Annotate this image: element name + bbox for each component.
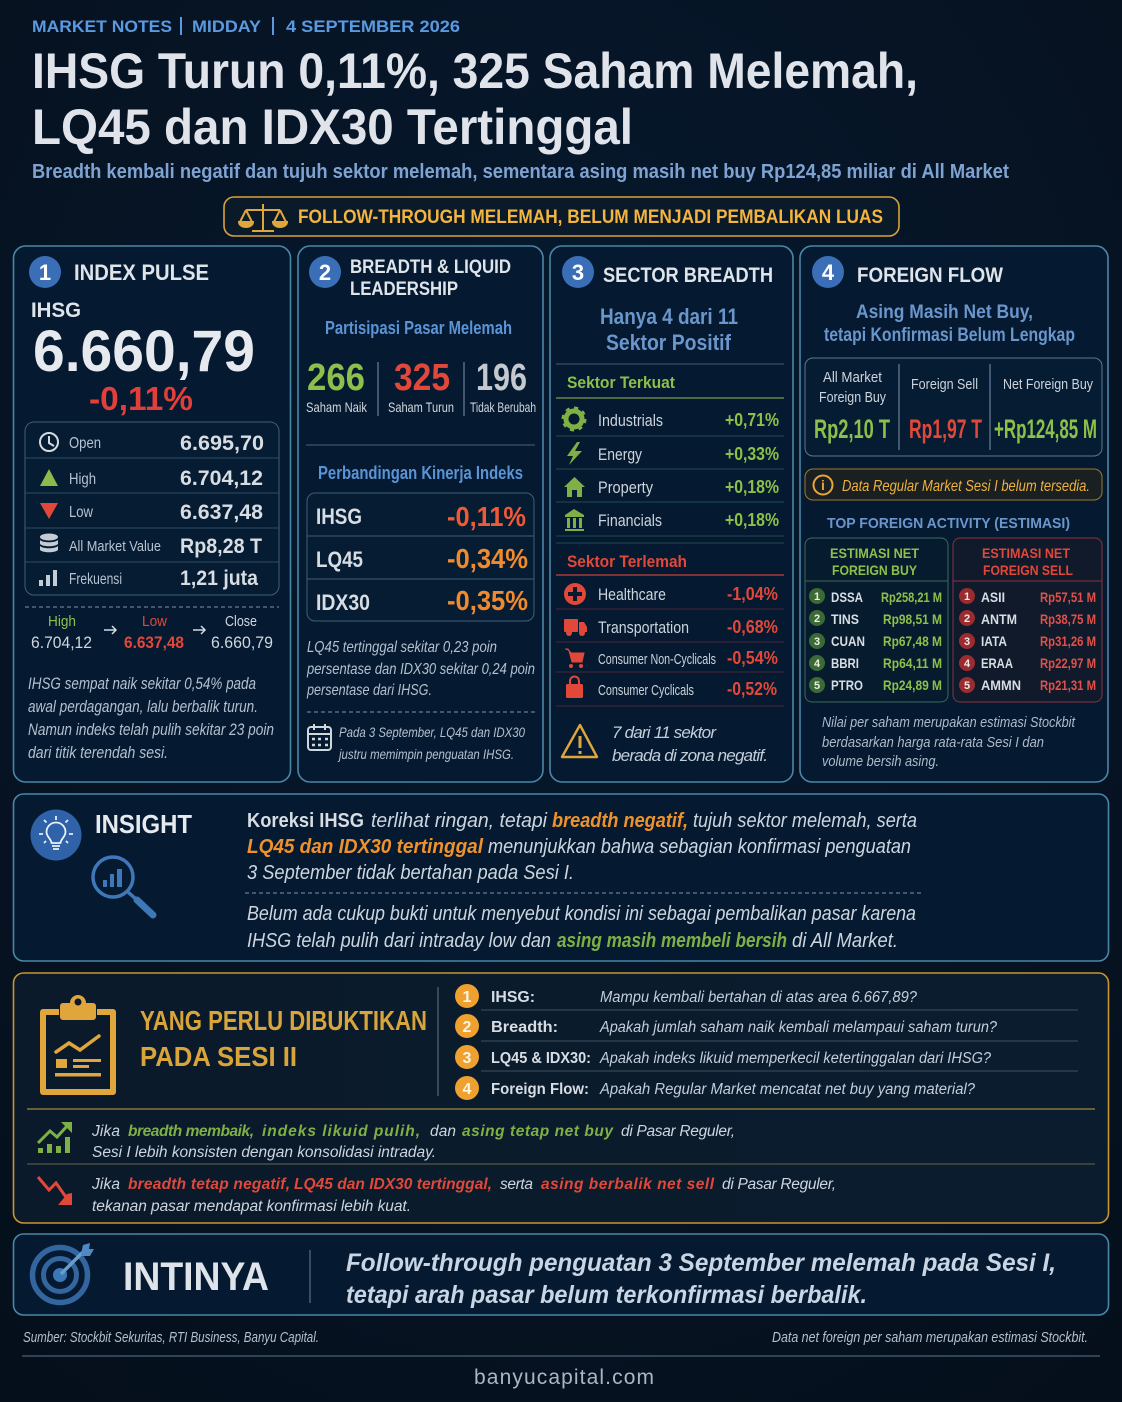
panel: bottom line [14, 1234, 1108, 1315]
scenario: negative: di Pasar Reguler, [722, 1176, 836, 1193]
table: net foreign buy: 4 [814, 658, 821, 670]
sector note: 7 dari 11 sektor [612, 723, 717, 742]
OHLC table: Low [69, 504, 93, 521]
scenario: positive: indeks likuid pulih, [262, 1123, 420, 1140]
weakest sectors: -0,52% [727, 679, 777, 699]
note: 3 September: justru memimpin penguatan IHSG. [337, 746, 514, 762]
foreign headline: Asing Masih Net Buy, [856, 302, 1033, 323]
icon: bars [39, 570, 57, 586]
scenario: positive: dan [430, 1123, 456, 1140]
foreign flow table: Foreign Sell [911, 376, 978, 393]
icon: cart [565, 649, 584, 668]
icon: house [564, 477, 585, 497]
table: net foreign buy: FOREIGN BUY [832, 562, 918, 578]
table: net foreign buy: Rp24,89 M [883, 677, 942, 693]
item 3: 3 [463, 1050, 472, 1067]
icon: calendar [308, 724, 331, 750]
IHSG headline value: 6.660,79 [33, 319, 255, 384]
header eyebrow [32, 17, 460, 36]
insight text: Koreksi IHSG [247, 810, 364, 832]
foreign estimate note [822, 714, 1076, 770]
bottom line text [346, 1249, 1056, 1309]
strongest sectors: Sektor Terkuat [567, 373, 675, 392]
breadth commentary: persentase dari IHSG. [306, 682, 432, 699]
weakest sectors: -0,54% [727, 648, 778, 668]
foreign flow table: Rp2,10 T [814, 414, 890, 444]
scenario: negative: serta [500, 1176, 533, 1193]
item 2: 2 [463, 1019, 472, 1036]
proof heading [140, 1005, 427, 1072]
index comparison: -0,34% [447, 543, 528, 574]
scenario: negative: asing berbalik net sell [541, 1176, 715, 1193]
table: net foreign buy: CUAN [831, 633, 865, 649]
table: net foreign buy: TINS [831, 611, 859, 627]
table: net foreign buy: Rp64,11 M [883, 655, 942, 671]
item 2 [455, 1014, 997, 1038]
table: net foreign sell [953, 538, 1102, 702]
item 2: Apakah jumlah saham naik kembali melampaui saham turun? [599, 1019, 997, 1036]
OHLC table [25, 422, 279, 595]
insight heading: INSIGHT [95, 809, 192, 839]
table: net foreign buy: Rp258,21 M [881, 589, 942, 605]
icon: up triangle [40, 469, 58, 486]
insight text: LQ45 dan IDX30 tertinggal [247, 836, 483, 858]
icon: database [40, 534, 58, 552]
table: net foreign buy [805, 538, 948, 702]
strongest sectors: +0,18% [725, 477, 779, 497]
scenario: negative [38, 1176, 836, 1215]
note: 3 September [337, 724, 525, 762]
breadth commentary: persentase dan IDX30 sekitar 0,24 poin [306, 661, 535, 678]
OHLC table: High [69, 471, 96, 488]
market participation: Partisipasi Pasar Melemah [325, 318, 512, 338]
table: net foreign buy: ESTIMASI NET [830, 545, 919, 561]
weakest sectors: -0,68% [727, 617, 778, 637]
table: net foreign sell: ASII [981, 589, 1005, 605]
scenario: negative: LQ45 dan IDX30 tertinggal, [294, 1176, 492, 1193]
index commentary [28, 674, 274, 762]
header eyebrow: MARKET NOTES [32, 17, 172, 36]
scenario: positive: di Pasar Reguler, [621, 1123, 735, 1140]
header eyebrow: 4 SEPTEMBER 2026 [286, 17, 460, 36]
panel 2 heading [309, 256, 511, 300]
weakest sectors: Healthcare [598, 585, 666, 604]
title: LQ45 dan IDX30 Tertinggal [32, 99, 633, 155]
bottom line heading: INTINYA [123, 1255, 269, 1299]
OHLC table: All Market Value [69, 538, 161, 555]
weakest sectors [556, 552, 784, 706]
insight text: asing masih membeli bersih [557, 930, 787, 952]
proof heading: YANG PERLU DIBUKTIKAN [140, 1005, 427, 1036]
market participation: 196 [476, 357, 527, 399]
panel 4 heading: 4 [822, 260, 835, 285]
strongest sectors: +0,71% [725, 410, 779, 430]
strongest sectors: Energy [598, 445, 642, 464]
footer website: banyucapital.com [474, 1366, 654, 1389]
OHLC table: Open [69, 435, 101, 452]
icon: warning triangle [562, 725, 597, 757]
table: net foreign buy: 1 [814, 591, 820, 603]
footer sources [23, 1329, 1088, 1346]
icon: magnifier with chart [93, 857, 153, 915]
foreign flow table: Rp1,97 T [909, 414, 982, 444]
top foreign activity heading: TOP FOREIGN ACTIVITY (ESTIMASI) [827, 515, 1070, 532]
item 4 [455, 1076, 975, 1100]
insight text: IHSG telah pulih dari intraday low dan [247, 930, 551, 952]
sector headline: Sektor Positif [606, 330, 732, 355]
scenario: positive: Sesi I lebih konsisten dengan konsolidasi intraday. [92, 1144, 436, 1161]
item 1: IHSG: [491, 989, 535, 1006]
index comparison: IHSG [316, 504, 362, 529]
table: net foreign sell: ESTIMASI NET [982, 545, 1070, 561]
OHLC table: 6.704,12 [180, 467, 263, 490]
checklist [455, 984, 1078, 1100]
item 4: Apakah Regular Market mencatat net buy yang material? [599, 1081, 975, 1098]
insight text: tujuh sektor melemah, serta [693, 810, 917, 832]
icon: down triangle [40, 503, 58, 519]
market participation: Saham Naik [306, 399, 368, 415]
table: net foreign sell: Rp57,51 M [1040, 589, 1096, 605]
market participation: Saham Turun [388, 399, 454, 415]
foreign headline: tetapi Konfirmasi Belum Lengkap [824, 325, 1075, 346]
scenario: positive: breadth membaik, [128, 1123, 254, 1140]
panel 4 heading: FOREIGN FLOW [857, 264, 1003, 287]
panel 1 heading: 1 [39, 260, 51, 285]
scenario: negative: breadth tetap negatif, [128, 1176, 290, 1193]
item 1 [455, 984, 917, 1008]
banner [224, 197, 899, 236]
panel 2 heading: BREADTH & LIQUID [350, 257, 511, 278]
insight text: breadth negatif, [552, 810, 688, 832]
table: net foreign sell: Rp31,26 M [1040, 633, 1096, 649]
insight text: terlihat ringan, tetapi [371, 810, 548, 832]
data alert: i [821, 477, 825, 493]
weakest sectors: -1,04% [727, 584, 778, 604]
index commentary: IHSG sempat naik sekitar 0,54% pada [28, 674, 256, 693]
foreign estimate note: volume bersih asing. [822, 753, 939, 770]
icon: lightning [567, 442, 582, 465]
market participation: Tidak Berubah [470, 399, 536, 415]
table: net foreign sell: AMMN [981, 677, 1021, 693]
bottom line text: tetapi arah pasar belum terkonfirmasi berbalik. [346, 1281, 867, 1309]
weakest sectors: Consumer Cyclicals [598, 682, 694, 699]
OHLC table: 1,21 juta [180, 567, 258, 590]
index comparison [307, 463, 534, 621]
item 4: 4 [463, 1081, 472, 1098]
foreign flow table: Net Foreign Buy [1003, 376, 1093, 393]
insight text [245, 810, 922, 952]
item 1: 1 [463, 989, 472, 1006]
title: IHSG Turun 0,11%, 325 Saham Melemah, [32, 43, 918, 99]
market participation: 325 [394, 357, 450, 399]
OHLC table: Frekuensi [69, 571, 122, 588]
foreign flow table: All Market [823, 369, 883, 386]
scenario: positive: Jika [91, 1123, 120, 1140]
index comparison: -0,11% [447, 501, 526, 532]
scenario: negative: tekanan pasar mendapat konfirmasi lebih kuat. [92, 1198, 411, 1215]
table: net foreign buy: 3 [814, 636, 820, 648]
title [32, 43, 918, 155]
sector note: berada di zona negatif. [612, 746, 768, 765]
panel: insight [14, 794, 1108, 961]
panel 3 heading [562, 256, 773, 288]
item 3 [455, 1045, 991, 1069]
foreign estimate note: berdasarkan harga rata-rata Sesi I dan [822, 734, 1044, 751]
table: net foreign sell: 3 [964, 636, 970, 648]
footer sources: Sumber: Stockbit Sekuritas, RTI Business, Banyu Capital. [23, 1329, 319, 1346]
subtitle: Breadth kembali negatif dan tujuh sektor melemah, sementara asing masih net buy Rp124,85 miliar di All Market [32, 161, 1009, 183]
high low close path: 6.660,79 [211, 633, 273, 652]
sector headline: Hanya 4 dari 11 [600, 304, 738, 329]
foreign flow table: Foreign Buy [819, 389, 886, 406]
weakest sectors: Sektor Terlemah [567, 552, 687, 571]
high low close path: High [48, 613, 76, 630]
strongest sectors: +0,18% [725, 510, 779, 530]
OHLC table: Rp8,28 T [180, 535, 262, 558]
table: net foreign buy: DSSA [831, 589, 863, 605]
bottom line text: Follow-through penguatan 3 September melemah pada Sesi I, [346, 1249, 1056, 1277]
table: net foreign buy: 5 [814, 680, 820, 692]
item 1: Mampu kembali bertahan di atas area 6.667,89? [600, 989, 917, 1006]
icon: bank [565, 509, 584, 531]
OHLC table: 6.637,48 [180, 501, 263, 524]
table: net foreign sell: IATA [981, 633, 1007, 649]
strongest sectors: +0,33% [725, 444, 779, 464]
icon: balance scale [239, 204, 287, 231]
note: 3 September: Pada 3 September, LQ45 dan IDX30 [339, 724, 525, 740]
table: net foreign sell: Rp22,97 M [1040, 655, 1096, 671]
breadth commentary: LQ45 tertinggal sekitar 0,23 poin [307, 639, 497, 656]
insight text: Belum ada cukup bukti untuk menyebut kondisi ini sebagai pembalikan pasar karena [247, 903, 916, 925]
strongest sectors [556, 373, 784, 543]
table: net foreign buy: BBRI [831, 655, 859, 671]
market participation: 266 [307, 357, 365, 399]
high low close path: 6.637,48 [124, 633, 184, 652]
index comparison: LQ45 [316, 547, 363, 572]
insight text: 3 September tidak bertahan pada Sesi I. [247, 862, 574, 884]
insight text: menunjukkan bahwa sebagian konfirmasi penguatan [488, 836, 911, 858]
panel 3 heading: 3 [572, 260, 584, 285]
panel: sector breadth [550, 246, 793, 782]
icon: clock [40, 433, 58, 451]
IHSG headline value: -0,11% [89, 380, 193, 417]
icon: rising chart [38, 1122, 72, 1153]
IHSG headline value: IHSG [31, 299, 81, 322]
foreign flow table [805, 358, 1102, 456]
panel: what must be proven [14, 973, 1108, 1223]
panel 1 heading: INDEX PULSE [74, 260, 209, 285]
header eyebrow: MIDDAY [192, 17, 262, 36]
panel 4 heading [812, 256, 1003, 288]
market participation [306, 318, 536, 416]
icon: health cross [564, 583, 586, 605]
panel 3 heading: SECTOR BREADTH [603, 264, 773, 287]
panel: breadth and liquid leadership [298, 246, 543, 782]
high low close path: Close [225, 613, 257, 630]
weakest sectors: Consumer Non-Cyclicals [598, 651, 716, 668]
table: net foreign sell: 1 [964, 591, 970, 603]
item 2: Breadth: [491, 1019, 558, 1036]
icon: light bulb [30, 810, 82, 860]
panel 2 heading: 2 [319, 260, 331, 285]
data alert [805, 469, 1102, 500]
table: net foreign sell: ANTM [981, 611, 1017, 627]
panel: index pulse [14, 246, 290, 782]
icon: clipboard chart [43, 995, 113, 1092]
table: net foreign sell: 2 [964, 613, 970, 625]
weakest sectors: Transportation [598, 618, 689, 637]
high low close path: 6.704,12 [31, 633, 92, 652]
insight text: di All Market. [792, 930, 898, 952]
index comparison: Perbandingan Kinerja Indeks [318, 463, 523, 483]
OHLC table: 6.695,70 [180, 432, 264, 455]
foreign headline [824, 302, 1075, 346]
icon: falling arrow [38, 1177, 72, 1205]
foreign estimate note: Nilai per saham merupakan estimasi Stockbit [822, 714, 1076, 731]
high low close path [31, 613, 273, 652]
scenario: positive [38, 1122, 735, 1161]
index commentary: dari titik terendah sesi. [28, 743, 168, 762]
table: net foreign sell: Rp38,75 M [1040, 611, 1096, 627]
table: net foreign sell: Rp21,31 M [1040, 677, 1096, 693]
item 4: Foreign Flow: [491, 1081, 589, 1098]
banner: FOLLOW-THROUGH MELEMAH, BELUM MENJADI PEMBALIKAN LUAS [298, 207, 883, 228]
sector headline [600, 304, 738, 355]
strongest sectors: Industrials [598, 411, 663, 430]
index comparison: -0,35% [447, 585, 528, 616]
strongest sectors: Property [598, 478, 653, 497]
icon: truck [564, 619, 587, 636]
proof heading: PADA SESI II [140, 1041, 297, 1072]
IHSG headline value [31, 299, 255, 417]
high low close path: Low [142, 613, 167, 630]
item 3: Apakah indeks likuid memperkecil ketertinggalan dari IHSG? [599, 1050, 991, 1067]
panel: foreign flow [800, 246, 1108, 782]
strongest sectors: Financials [598, 511, 662, 530]
table: net foreign sell: 5 [964, 680, 970, 692]
table: net foreign buy: 2 [814, 613, 820, 625]
table: net foreign sell: FOREIGN SELL [983, 562, 1073, 578]
sector note [612, 723, 768, 765]
panel 1 heading [29, 256, 209, 288]
index comparison: IDX30 [316, 590, 370, 615]
index commentary: Namun indeks telah pulih sekitar 23 poin [28, 720, 274, 739]
index commentary: awal perdagangan, lalu berbalik turun. [28, 697, 258, 716]
breadth commentary [306, 639, 535, 699]
table: net foreign buy: Rp67,48 M [883, 633, 942, 649]
icon: gear [563, 408, 585, 430]
icon: shopping bag [566, 676, 583, 698]
table: net foreign sell: 4 [964, 658, 971, 670]
table: net foreign buy: Rp98,51 M [883, 611, 942, 627]
table: net foreign sell: ERAA [981, 655, 1013, 671]
icon: target [32, 1243, 94, 1302]
scenario: negative: Jika [91, 1176, 120, 1193]
scenario: positive: asing tetap net buy [462, 1123, 614, 1140]
panel 2 heading: LEADERSHIP [350, 279, 458, 300]
table: net foreign buy: PTRO [831, 677, 863, 693]
item 3: LQ45 & IDX30: [491, 1050, 591, 1067]
